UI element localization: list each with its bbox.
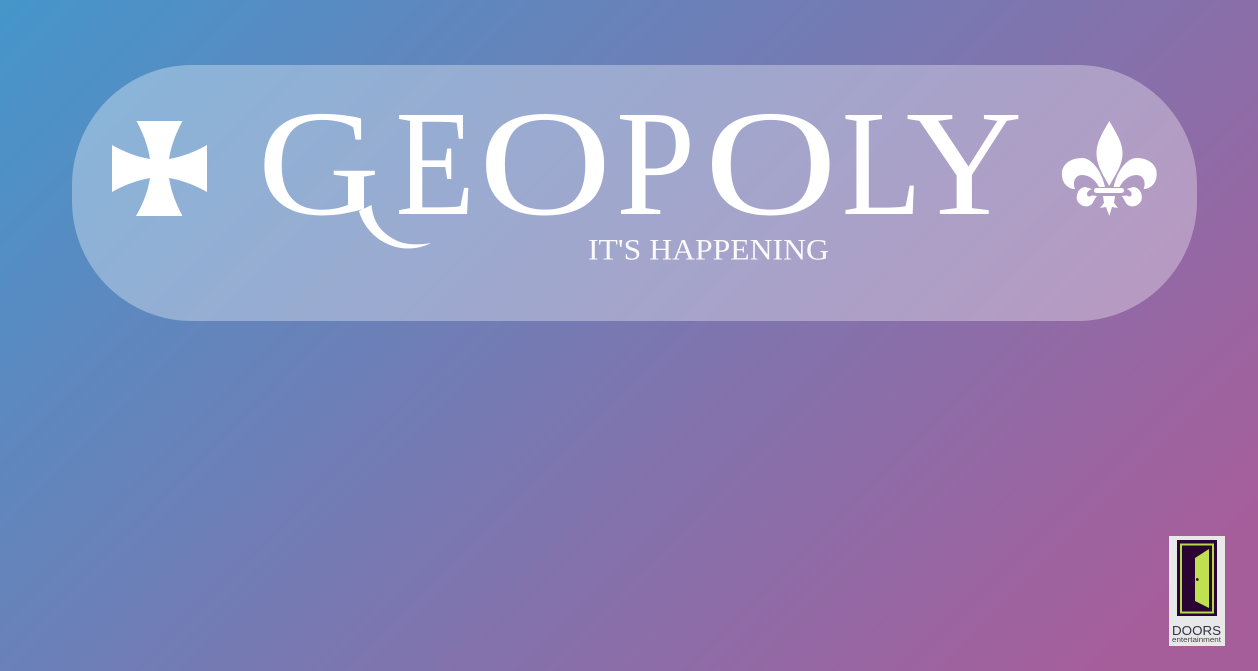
subtitle: IT'S HAPPENING: IT'S HAPPENING (588, 233, 829, 266)
title: GEOPOLY: O (478, 80, 612, 247)
icon: door (1177, 540, 1217, 616)
logo: Doors Entertainment: entertainment (1172, 635, 1222, 644)
title: GEOPOLY: G (257, 80, 380, 247)
title banner pill (72, 65, 1197, 321)
title: GEOPOLY: L (842, 79, 922, 247)
icon: fleur-de-lis (1062, 121, 1157, 216)
title: GEOPOLY: E (395, 80, 475, 247)
title: GEOPOLY: O (704, 80, 837, 247)
title: GEOPOLY (257, 79, 1022, 248)
logo: Doors Entertainment (1169, 536, 1225, 646)
icon: cross pattee (112, 121, 207, 216)
title: GEOPOLY: Y (906, 80, 1022, 247)
logo wordmark: DOORS (1172, 623, 1221, 638)
title: GEOPOLY: P (616, 79, 695, 247)
